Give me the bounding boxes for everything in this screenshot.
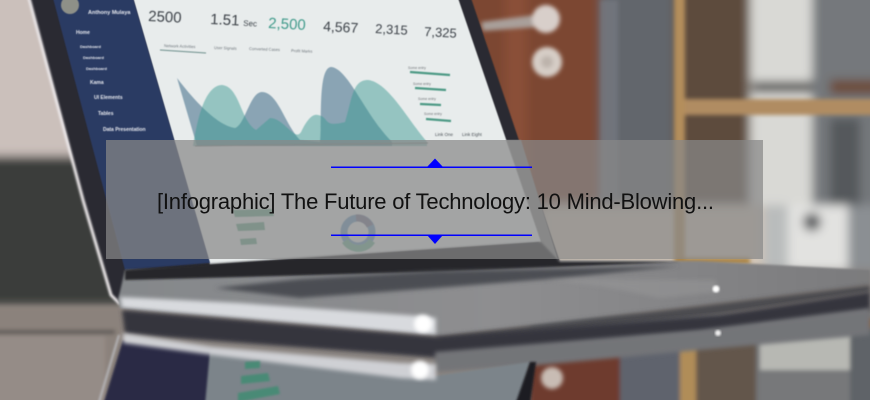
side progress bars: Some entry <box>408 66 426 70</box>
side progress bars <box>408 66 483 137</box>
laptop screen: Dashboard <box>83 55 104 60</box>
sidebar <box>53 0 210 270</box>
side progress bars: Link Eight <box>462 132 483 137</box>
laptop screen: Tables <box>98 111 114 117</box>
dashboard numbers: Network Activities <box>164 43 195 49</box>
area chart <box>177 67 428 146</box>
top rule with upward triangle <box>331 158 532 168</box>
side progress bars: Some entry <box>424 112 442 116</box>
laptop lid bezel <box>29 0 560 306</box>
side progress bars: Some entry <box>418 97 436 101</box>
table reflection background <box>0 306 870 400</box>
side progress bars: Some entry <box>413 82 431 86</box>
dashboard numbers: User Signals <box>214 45 237 51</box>
dashboard numbers: 2500 <box>148 8 182 27</box>
side progress bars: Link One <box>435 132 454 137</box>
wooden shelf <box>600 0 870 264</box>
translucent title panel <box>106 140 763 259</box>
dashboard numbers: 1.51 Sec <box>210 11 258 30</box>
laptop keyboard deck <box>118 242 870 344</box>
lower dashboard bars and donut <box>233 209 372 248</box>
dashboard numbers: 4,567 <box>323 18 359 36</box>
bottom rule with downward triangle <box>331 234 532 244</box>
laptop screen: Kama <box>90 80 104 86</box>
dashboard numbers: Converted Cases <box>249 46 280 52</box>
laptop screen: Dashboard <box>86 66 107 71</box>
laptop screen: Data Presentation <box>103 127 146 133</box>
laptop screen: Dashboard <box>80 44 101 49</box>
laptop screen: Anthony Mulaya <box>88 10 131 16</box>
dashboard numbers: 7,325 <box>424 24 457 41</box>
dashboard numbers: 2,500 <box>268 15 306 34</box>
dashboard numbers: 2,315 <box>375 21 408 38</box>
door handle <box>481 5 562 77</box>
dashboard numbers: Profit Marks <box>291 48 312 54</box>
title: [Infographic] The Future of Technology: 10 Mind-Blowing... <box>157 189 714 214</box>
laptop screen: UI Elements <box>94 95 123 101</box>
laptop screen: Home <box>76 30 90 36</box>
dashboard numbers <box>148 8 457 54</box>
table reflection of laptop <box>99 292 870 400</box>
